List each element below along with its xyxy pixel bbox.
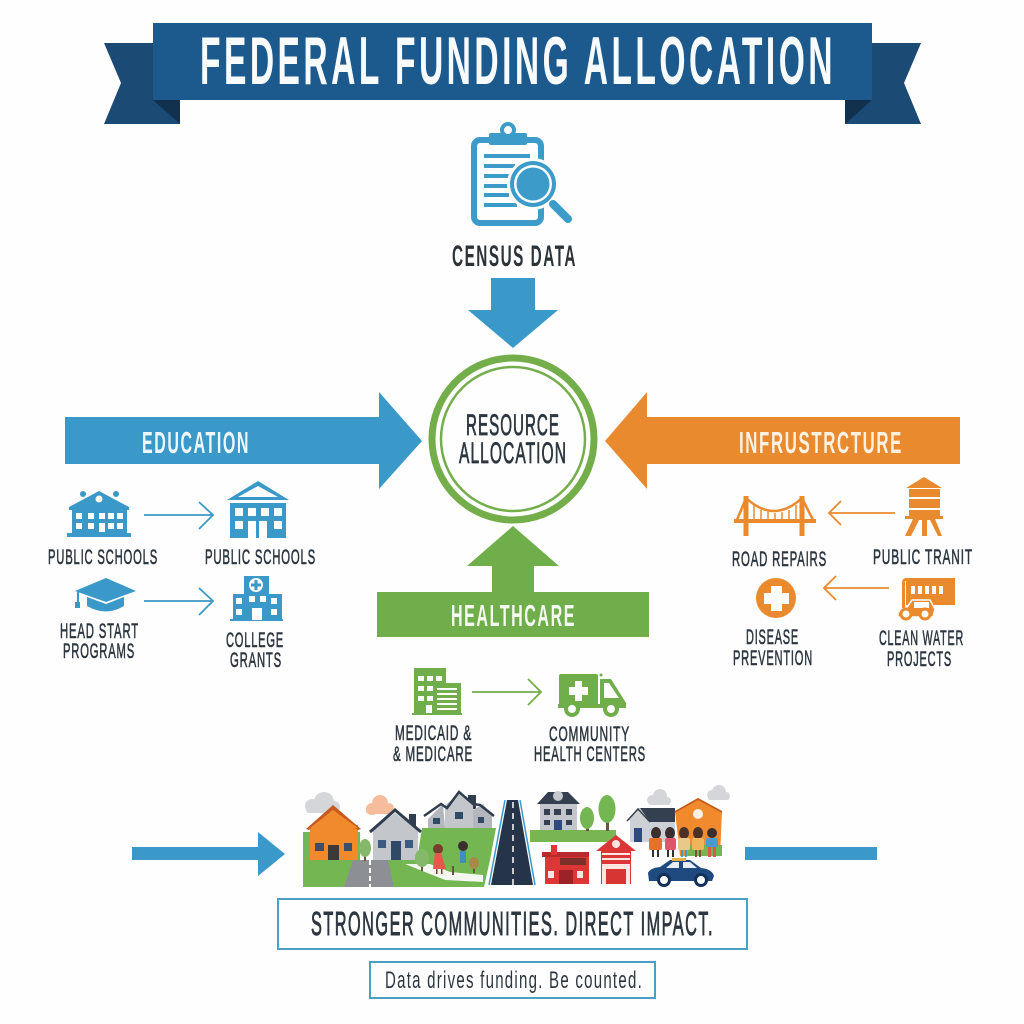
icon: bus and car	[898, 578, 955, 619]
main road	[489, 800, 535, 885]
label: head start programs: HEAD START	[60, 620, 139, 643]
small tree	[359, 839, 371, 861]
icon: clipboard with magnifier	[474, 124, 568, 223]
icon: school	[67, 491, 131, 537]
label: road repairs: ROAD REPAIRS	[732, 548, 827, 571]
resource allocation circle	[432, 358, 594, 520]
title banner	[104, 23, 921, 124]
circle text: RESOURCE	[466, 409, 560, 442]
icon: ambulance	[558, 674, 626, 715]
left ground	[303, 828, 496, 887]
circle text	[459, 409, 567, 470]
arrow: school to school	[144, 502, 213, 529]
orange house	[306, 805, 361, 860]
police car	[648, 858, 714, 886]
census data label: CENSUS DATA	[452, 240, 577, 273]
fire station left	[542, 845, 589, 884]
icon: plus circle	[756, 578, 796, 618]
label: college grants: GRANTS	[230, 649, 282, 672]
arrow: into community	[132, 832, 285, 876]
grey house right	[627, 808, 675, 842]
callout: be counted: Data drives funding. Be counted.	[385, 967, 643, 994]
label: community health centers	[534, 723, 646, 766]
panel: infrastructure items	[732, 477, 973, 671]
bar: out of community	[745, 847, 877, 860]
grey house	[370, 810, 421, 860]
two people	[433, 841, 468, 874]
label: public schools: PUBLIC SCHOOLS	[48, 546, 158, 569]
label: head start programs: PROGRAMS	[63, 640, 135, 663]
label: college grants	[226, 629, 284, 672]
label: medicaid and medicare: MEDICAID &	[395, 722, 472, 745]
label: clean water projects: PROJECTS	[887, 648, 952, 671]
arrow: public transit to road repairs	[829, 501, 895, 525]
grey school	[537, 791, 580, 831]
school lawn	[530, 830, 616, 842]
label: clean water projects	[879, 627, 964, 671]
label: disease prevention	[733, 626, 813, 670]
arrow: healthcare: HEALTHCARE	[451, 598, 576, 633]
icon: public school building	[227, 481, 289, 538]
arrow: census down	[468, 278, 558, 348]
icon: water tower	[905, 477, 943, 536]
road small	[344, 860, 394, 887]
panel: healthcare items	[393, 668, 646, 766]
label: college grants: COLLEGE	[226, 629, 284, 652]
label: head start programs	[60, 620, 139, 663]
yard trees	[415, 849, 479, 875]
label: community health centers: COMMUNITY	[549, 723, 630, 746]
trees	[580, 795, 616, 831]
label: public schools 2: PUBLIC SCHOOLS	[205, 546, 316, 569]
arrow: clean water to disease prevention	[824, 576, 889, 600]
panel: education items	[48, 481, 316, 672]
icon: medical building	[412, 668, 462, 715]
icon: hospital	[230, 576, 283, 621]
arrow: infrastructure	[605, 392, 960, 489]
circle text: ALLOCATION	[459, 437, 567, 470]
arrow: medicaid to health centers	[472, 679, 541, 705]
callout: be counted	[370, 962, 655, 998]
label: disease prevention: DISEASE	[746, 626, 799, 649]
icon: bridge	[734, 496, 816, 536]
callout: stronger communities	[278, 899, 747, 949]
label: medicaid and medicare: & MEDICARE	[393, 743, 473, 766]
arrow: healthcare	[377, 526, 649, 637]
icon: graduation cap	[75, 578, 136, 612]
arrow: head start to college	[144, 588, 213, 615]
fire station right	[596, 835, 636, 884]
label: disease prevention: PREVENTION	[733, 647, 813, 670]
label: community health centers: HEALTH CENTERS	[534, 743, 646, 766]
arrow: education	[65, 392, 422, 489]
orange building	[675, 798, 722, 856]
arrow: education: EDUCATION	[142, 425, 250, 460]
clouds	[305, 785, 730, 815]
two-gable house	[424, 792, 494, 828]
group of people	[649, 827, 718, 857]
illustration: community scene	[303, 785, 730, 887]
label: medicaid and medicare	[393, 722, 473, 766]
